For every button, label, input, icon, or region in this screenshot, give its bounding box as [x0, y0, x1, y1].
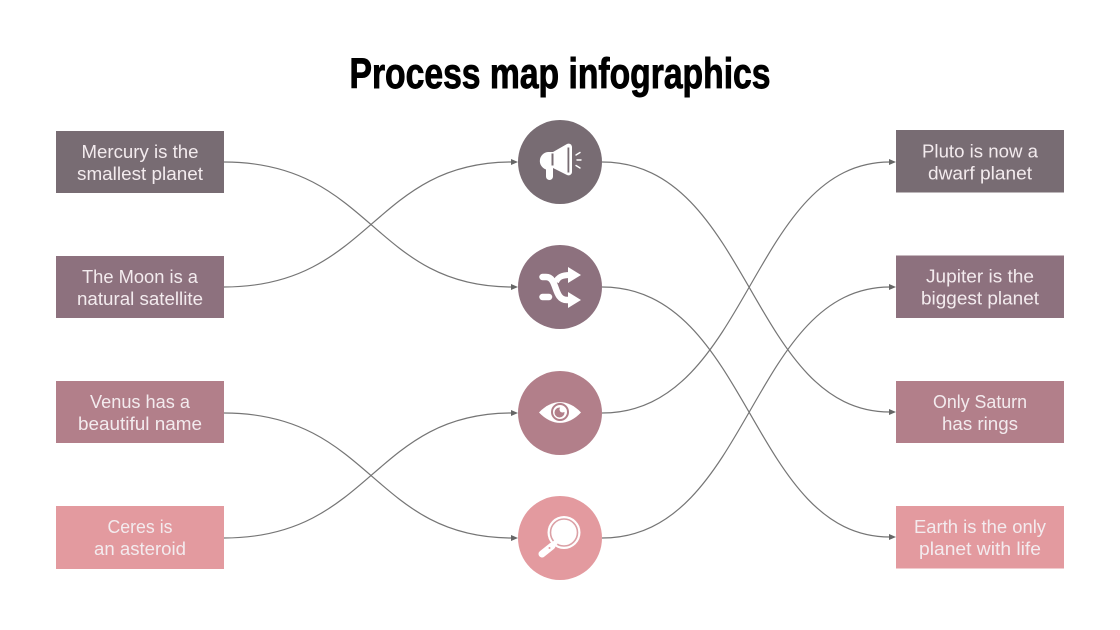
right box: Pluto [896, 130, 1064, 192]
left box: Mercury: Mercury is the [82, 142, 198, 162]
right box: Pluto: dwarf planet [928, 164, 1032, 184]
circle icon: magnifier [518, 496, 602, 580]
circle icon: shuffle [518, 245, 602, 329]
title: Process map infographics [350, 50, 770, 98]
right box: Jupiter: Jupiter is the [926, 266, 1034, 286]
left box: Venus: Venus has a [90, 392, 191, 412]
circle icon: eye [518, 371, 602, 455]
connector: Ceres to eye icon [224, 410, 518, 538]
connector: Moon to megaphone icon [224, 159, 518, 287]
left box: Moon: The Moon is a [82, 267, 199, 287]
left box: Moon: natural satellite [77, 289, 203, 309]
connector: megaphone to Saturn [602, 162, 896, 415]
right box: Earth: Earth is the only [914, 517, 1046, 537]
left box: Moon [56, 256, 224, 318]
right box: Earth [896, 506, 1064, 568]
left box: Venus: beautiful name [78, 414, 202, 434]
right box: Saturn: has rings [942, 414, 1018, 434]
right box: Saturn: Only Saturn [933, 392, 1027, 412]
right box: Pluto: Pluto is now a [922, 142, 1039, 162]
circle icon: megaphone [518, 120, 602, 204]
connector: eye to Pluto [602, 159, 896, 413]
left box: Mercury [56, 131, 224, 193]
right box: Jupiter [896, 256, 1064, 318]
left box: Venus [56, 381, 224, 443]
left box: Mercury: smallest planet [77, 164, 203, 184]
left box: Ceres [56, 506, 224, 569]
right box: Saturn [896, 381, 1064, 443]
connector: magnifier to Jupiter [602, 284, 896, 538]
right box: Jupiter: biggest planet [921, 288, 1039, 308]
right box: Earth: planet with life [919, 539, 1041, 559]
connector: shuffle to Earth [602, 287, 896, 540]
left box: Ceres: Ceres is [108, 517, 172, 537]
connector: Venus to magnifier icon [224, 413, 518, 541]
connector: Mercury to shuffle icon [224, 162, 518, 290]
left box: Ceres: an asteroid [94, 539, 186, 559]
